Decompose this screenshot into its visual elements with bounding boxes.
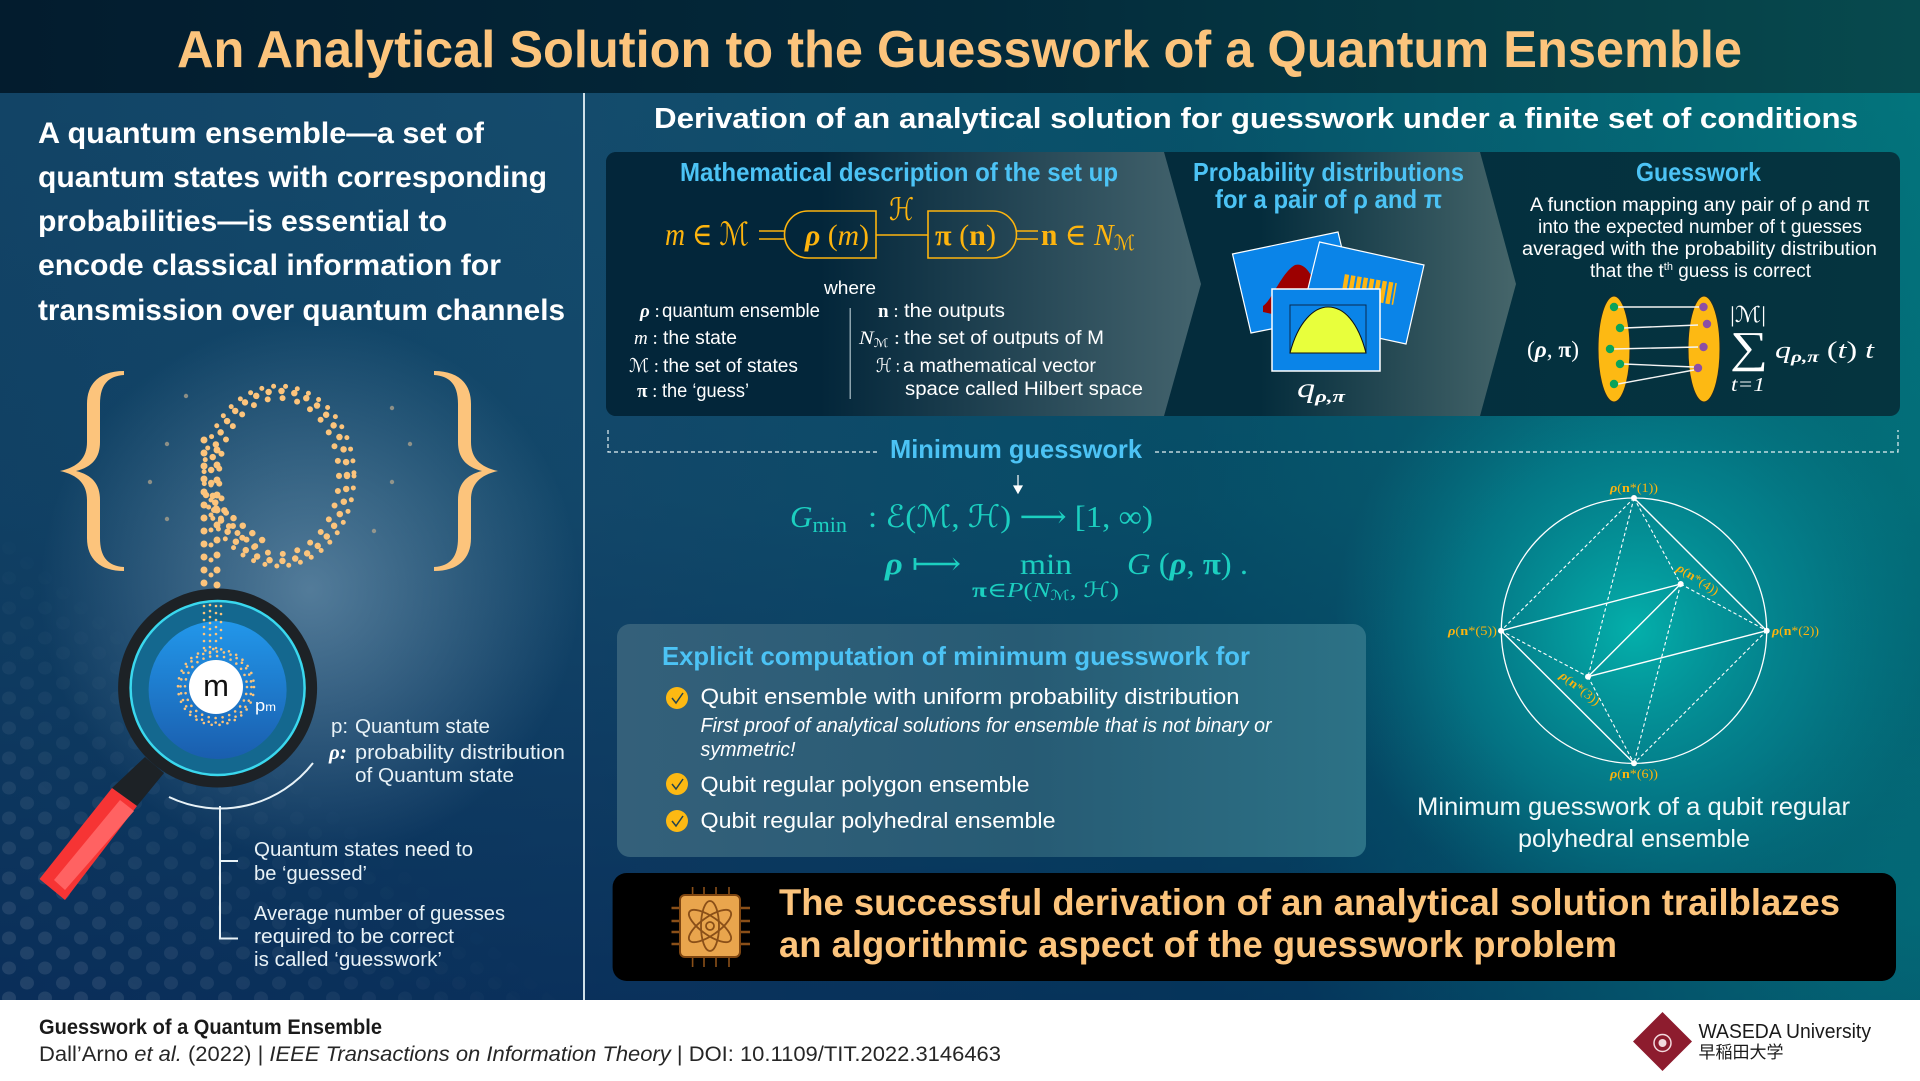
guesswork sum formula: |ℳ| (1730, 302, 1766, 327)
panel: explicit computation (617, 624, 1366, 857)
q label: ρ,π (1314, 387, 1346, 406)
conclusion banner: an algorithmic aspect of the guesswork problem (779, 924, 1617, 965)
legend: quantum state symbols: Quantum state (355, 715, 490, 738)
heading: Guesswork (1636, 157, 1761, 187)
handle (112, 757, 164, 806)
left column intro text: probabilities—is essential to (38, 205, 447, 238)
list item 1 (666, 684, 1273, 761)
icon: left brace (60, 371, 124, 571)
icon: dotted rho (204, 386, 354, 590)
circuit formula: m ∈ ℳ (665, 216, 749, 252)
heading: Minimum guesswork (890, 434, 1143, 464)
description: averaged with the probability distribution (1522, 239, 1877, 260)
state m (189, 660, 243, 714)
definitions: left list: the state (663, 328, 737, 349)
heading: Probability distributions (1193, 157, 1464, 187)
lens rim (118, 588, 317, 788)
polyhedral ensemble diagram (1417, 481, 1850, 853)
q label: q (1297, 373, 1315, 403)
dotted trail in lens (178, 605, 254, 725)
description: guess is correct (1673, 261, 1812, 282)
formula: , ℋ) (1070, 578, 1119, 602)
list item 1: Qubit ensemble with uniform probability distribution (700, 684, 1240, 709)
circuit formula: ℋ (889, 192, 914, 227)
definitions: right list: space called Hilbert space (905, 379, 1143, 400)
description: th (1664, 261, 1673, 273)
definitions: left list: ρ : (639, 301, 660, 322)
callout text: Quantum states need to (254, 838, 473, 861)
heading: Explicit computation of minimum guesswork for (662, 641, 1250, 671)
callout text (254, 838, 505, 971)
formula: min (1020, 548, 1072, 581)
legend: quantum state symbols: ρ: (328, 740, 347, 764)
footer: Dall’Arno et al. (2022) | IEEE Transactions on Information Theory | DOI: 10.1109/TIT.2022.3146463 (39, 1043, 1001, 1066)
formula: G (790, 499, 813, 534)
vertex labels (1447, 481, 1819, 781)
column divider (583, 93, 585, 1001)
definitions: left list: the ‘guess’ (662, 381, 749, 402)
definitions: left list: m : (634, 328, 658, 349)
citation: Guesswork of a Quantum Ensemble (39, 1016, 382, 1039)
definitions: right list: ℋ : (876, 356, 900, 377)
vertex labels: ρ(n*(2)) (1771, 624, 1819, 638)
list item 1: symmetric! (700, 739, 796, 761)
definitions: right list: the outputs (904, 301, 1005, 322)
polyhedral ensemble diagram: polyhedral ensemble (1518, 825, 1750, 853)
definitions: right list: ℳ (874, 336, 889, 350)
circuit formula: n ∈ N (1041, 217, 1115, 252)
vertex labels: ρ(n*(4)) (1673, 560, 1721, 598)
chart cards (1232, 232, 1424, 371)
pair label: (ρ, π) (1527, 337, 1579, 362)
legend: quantum state symbols: of Quantum state (355, 764, 514, 787)
formula: : ℰ(ℳ, ℋ) ⟶ [1, ∞) (868, 499, 1153, 534)
circuit formula: ρ (m) (804, 219, 869, 252)
vertex labels: ρ(n*(5)) (1447, 624, 1497, 638)
guesswork sum formula: ∑ (1730, 323, 1768, 372)
inner lens (149, 621, 287, 759)
title: An Analytical Solution to the Guesswork of a Quantum Ensemble (177, 21, 1742, 79)
heading: Mathematical description of the set up (680, 157, 1118, 187)
list item 1: First proof of analytical solutions for ensemble that is not binary or (700, 715, 1273, 737)
logo: Waseda University (1633, 1012, 1871, 1071)
left column intro text: encode classical information for (38, 249, 501, 282)
legend: quantum state symbols: probability distribution (355, 741, 565, 764)
definitions: left list: the set of states (663, 356, 798, 377)
definitions: left list (629, 301, 820, 402)
formula: π∈P(N (972, 578, 1046, 602)
footer (0, 1000, 1920, 1081)
front chart (1272, 289, 1380, 371)
guesswork sum formula: ( (1819, 338, 1838, 364)
icon: quantum chip (672, 887, 750, 967)
guesswork sum formula (1730, 302, 1876, 396)
label p m: pm (255, 696, 276, 715)
header bar with title (0, 0, 1920, 93)
magnifying glass: m (203, 668, 229, 703)
left column intro text: transmission over quantum channels (38, 294, 565, 327)
icon: right brace (434, 371, 498, 571)
description (1522, 195, 1877, 282)
definitions: right list: N (858, 328, 875, 349)
callout text: Average number of guesses (254, 902, 505, 925)
description: into the expected number of t guesses (1538, 217, 1862, 238)
callout text: is called ‘guesswork’ (254, 948, 442, 971)
formula: min (813, 512, 847, 537)
circuit formula: π (n) (935, 219, 996, 252)
list item 2: Qubit regular polygon ensemble (700, 772, 1030, 797)
definitions: right list: the set of outputs of M (904, 328, 1104, 349)
circuit formula: ℳ (1114, 231, 1135, 255)
definitions: left list: quantum ensemble (662, 301, 820, 322)
where: where (823, 277, 876, 298)
panel: probability distributions (1164, 152, 1516, 416)
left column intro text: A quantum ensemble—a set of (38, 117, 485, 150)
definitions: left list: ℳ : (629, 356, 659, 377)
logo: Waseda University: 早稲田大学 (1698, 1043, 1784, 1062)
caption: Minimum guesswork of a qubit regular (1417, 793, 1850, 821)
guesswork sum formula: q (1775, 338, 1791, 364)
formula: ℳ (1050, 589, 1070, 604)
guesswork sum formula: t=1 (1731, 374, 1765, 396)
callout text: required to be correct (254, 925, 454, 948)
definitions: right list (858, 301, 1143, 400)
panel: probability distributions: for a pair of ρ and π (1215, 184, 1442, 214)
magnifying glass (40, 588, 317, 900)
dashed bracket (608, 430, 1898, 452)
back right chart (1300, 242, 1424, 344)
mapping diagram (1598, 296, 1720, 402)
circuit formula (665, 192, 1135, 258)
panel: mathematical description (606, 152, 1201, 416)
definitions: right list: : (888, 328, 900, 349)
legend: quantum state symbols (328, 715, 565, 787)
formula: G (ρ, π) . (1127, 546, 1248, 581)
guesswork sum formula: t) t (1838, 338, 1872, 364)
vertex labels: ρ(n*(6)) (1609, 767, 1658, 781)
conclusion text: The successful derivation of an analytical solution trailblazes (779, 882, 1840, 923)
logo: Waseda University: WASEDA University (1698, 1021, 1871, 1043)
guesswork sum formula: ρ,π (1790, 349, 1821, 366)
definitions: right list: a mathematical vector (903, 356, 1097, 377)
legend: quantum state symbols: p: (331, 715, 348, 738)
left column intro text: quantum states with corresponding (38, 161, 547, 194)
panel: guesswork (606, 152, 1900, 416)
ensemble braces and dotted rho (60, 371, 498, 590)
formula: ρ ⟼ (884, 546, 961, 581)
vertex labels: ρ(n*(1)) (1609, 481, 1658, 495)
minimum guesswork section (608, 430, 1898, 604)
conclusion banner (613, 873, 1896, 981)
arrow (1014, 475, 1022, 493)
callout bracket (169, 763, 313, 938)
description: that the t (1590, 261, 1664, 282)
divider (850, 308, 851, 399)
right column heading: Derivation of an analytical solution for guesswork under a finite set of conditions (654, 103, 1858, 135)
definitions: left list: π : (637, 381, 657, 402)
back left chart (1232, 232, 1357, 333)
definitions: right list: n : (878, 301, 899, 322)
formula (790, 499, 1248, 604)
list item 3: Qubit regular polyhedral ensemble (700, 808, 1056, 833)
description: A function mapping any pair of ρ and π (1530, 195, 1870, 216)
callout text: be ‘guessed’ (254, 862, 367, 885)
sphere and edges (1501, 498, 1767, 763)
vertex labels: ρ(n*(3)) (1556, 668, 1603, 708)
left column intro text (38, 117, 565, 327)
